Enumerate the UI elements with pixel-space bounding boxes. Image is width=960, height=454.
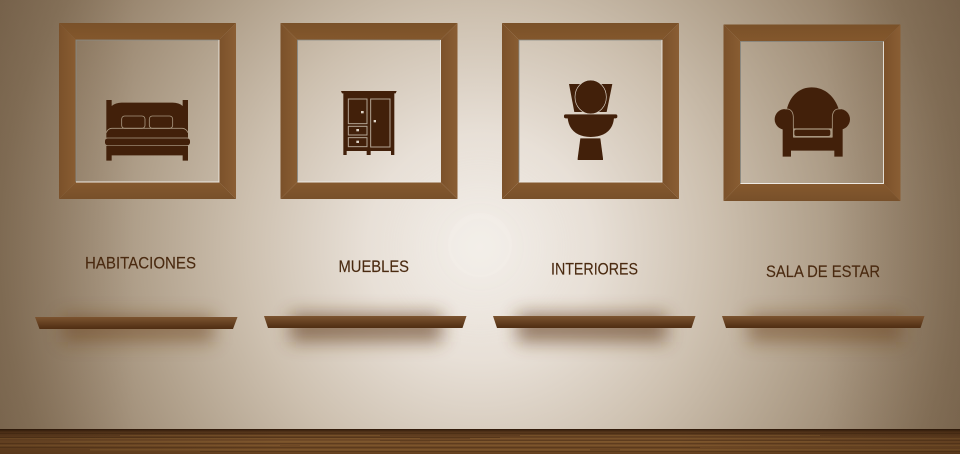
label: interiores: INTERIORES	[551, 260, 638, 278]
shelf 2	[264, 314, 466, 342]
icon: wardrobe	[341, 91, 397, 155]
label: habitaciones: HABITACIONES	[85, 254, 196, 272]
frame 2	[280, 23, 458, 199]
shelf 4	[722, 315, 924, 342]
central light glow	[405, 172, 555, 322]
frame 3	[502, 23, 679, 199]
icon: armchair	[775, 87, 850, 157]
shelf 3	[493, 314, 696, 342]
frame 1	[59, 23, 236, 199]
frame 4	[724, 24, 900, 201]
label: sala de estar: SALA DE ESTAR	[766, 262, 880, 281]
icon: toilet	[564, 80, 617, 160]
shelf 1	[35, 316, 238, 342]
wooden floor	[0, 429, 960, 454]
label: muebles: MUEBLES	[338, 257, 409, 276]
icon: bed	[105, 100, 190, 161]
